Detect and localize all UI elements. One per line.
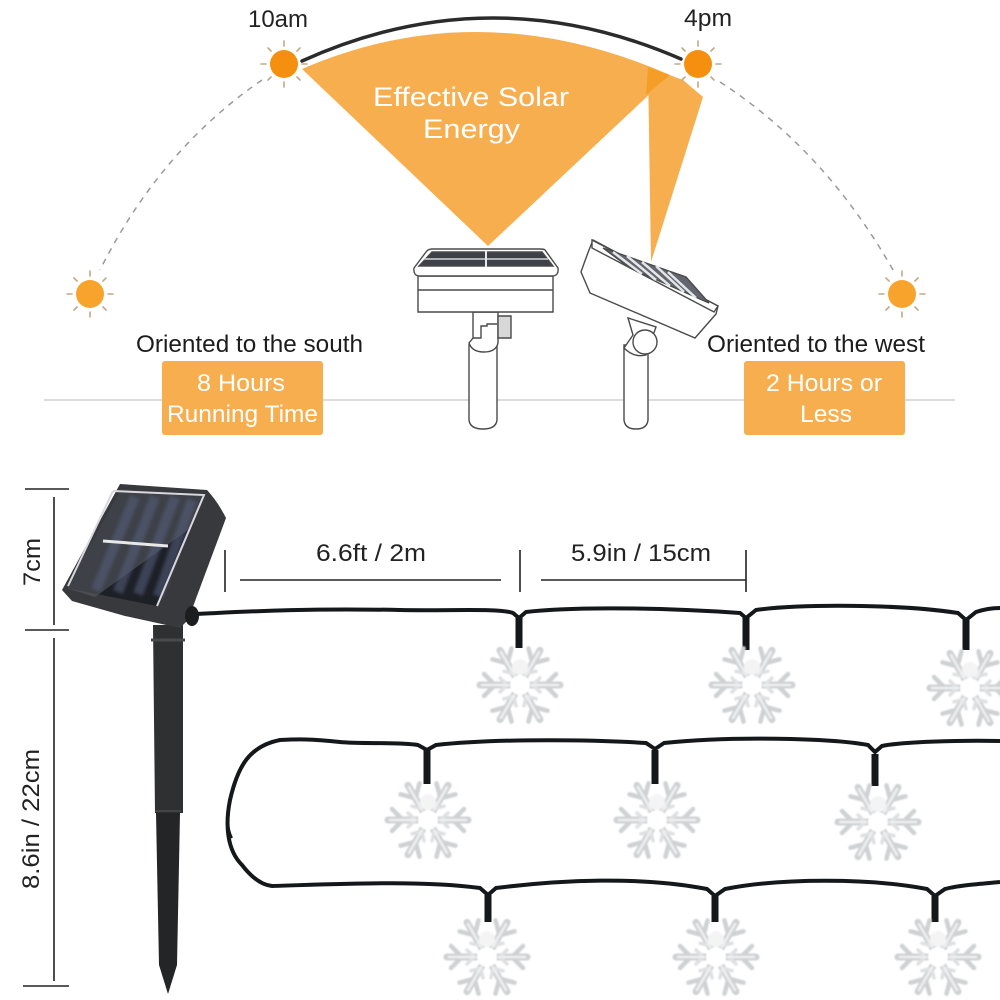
dimension: 5.9in / 15cm (541, 540, 746, 592)
dimension: 8.6in / 22cm (18, 638, 69, 986)
sun path arc: dark effective section (302, 18, 681, 61)
heading: effective solar energy (373, 82, 569, 144)
sun path arc: right dashed section (720, 82, 893, 270)
light string wire (195, 606, 1000, 922)
dimension: 6.6ft / 2m: 6.6ft / 2m (316, 540, 426, 567)
label: 4pm: 4pm (684, 5, 732, 32)
effective energy beam south (302, 32, 670, 246)
icon: sun sunrise (67, 271, 113, 317)
secondary energy beam west (648, 67, 703, 262)
label: 10am: 10am (248, 6, 308, 33)
heading: effective solar energy: Effective Solar (373, 82, 569, 112)
solar stake (151, 625, 185, 994)
solar panel box (62, 484, 226, 628)
callout: 2 hours or less: 2 Hours or (766, 370, 882, 397)
callout: 8 hours running time: 8 Hours (197, 370, 285, 397)
illustration: west-facing solar panel (581, 240, 718, 429)
callout: 2 hours or less (744, 361, 905, 435)
callout: 8 hours running time (162, 361, 323, 435)
dimension: 6.6ft / 2m (225, 540, 520, 592)
illustration: south-facing solar panel (414, 249, 558, 429)
label: oriented west: Oriented to the west (707, 331, 925, 358)
callout: 2 hours or less: Less (800, 401, 852, 428)
snowflake lights row 3 (432, 902, 993, 1000)
icon: sun sunset (879, 271, 925, 317)
icon: sun 10am (261, 41, 307, 87)
snowflake lights row 2 (373, 765, 933, 877)
dimension: 7cm (19, 489, 69, 630)
icon: sun 4pm (675, 41, 721, 87)
dimension: 5.9in / 15cm: 5.9in / 15cm (571, 540, 711, 567)
ground line (44, 399, 955, 401)
sun path arc: left dashed section (100, 80, 262, 270)
callout: 8 hours running time: Running Time (167, 401, 318, 428)
beam overlap (646, 67, 670, 95)
snowflake lights row 1 (465, 630, 1000, 743)
dimension: 7cm: 7cm (19, 538, 46, 586)
label: oriented south: Oriented to the south (136, 331, 363, 358)
dimension: 8.6in / 22cm: 8.6in / 22cm (18, 749, 45, 889)
heading: effective solar energy: Energy (423, 114, 521, 144)
